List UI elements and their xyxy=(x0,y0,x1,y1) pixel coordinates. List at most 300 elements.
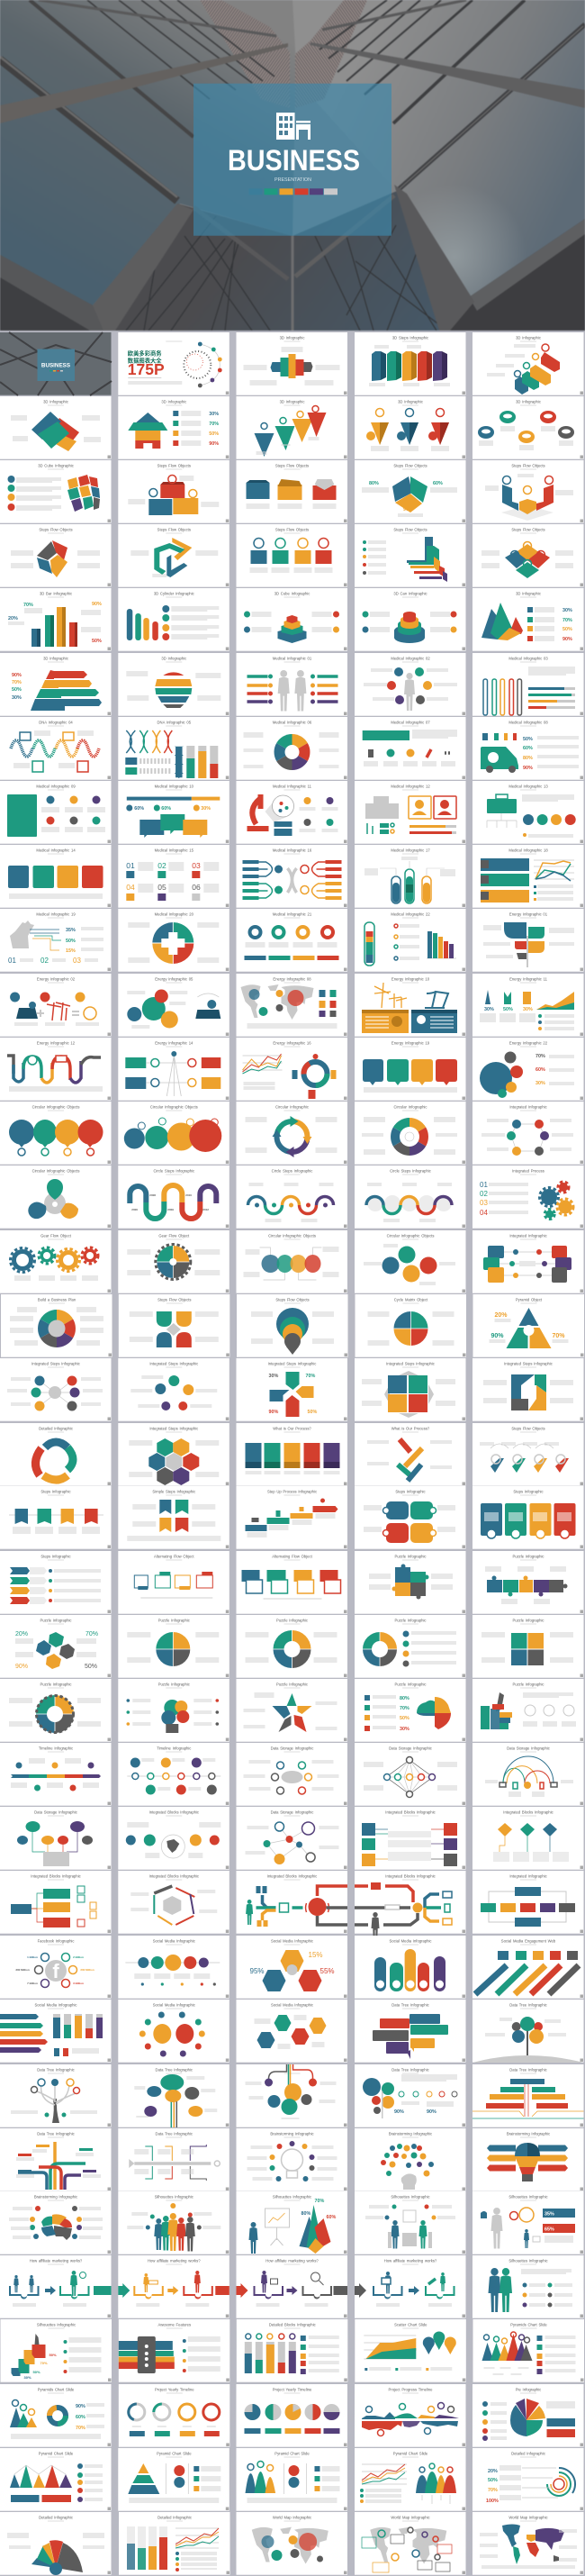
slide 64 xyxy=(355,1102,466,1165)
slide 1: cover thumbnail xyxy=(0,332,112,395)
slide 26: 50% xyxy=(12,687,22,693)
slide 171: Detailed Infographic xyxy=(39,2515,73,2520)
slide 139: Data Tree Infographic xyxy=(392,2068,429,2072)
slide 70: 04 xyxy=(480,1209,488,1217)
slide 44: Medical Infographic 17 xyxy=(391,848,430,852)
slide 107 xyxy=(118,1679,230,1742)
slide 129: Social Media Infographic xyxy=(389,1938,432,1944)
slide 30 xyxy=(472,653,583,716)
slide 83: 90% xyxy=(268,1410,278,1415)
slide 63 xyxy=(236,1102,347,1165)
slide 42: 02 xyxy=(158,861,166,870)
slide 174 xyxy=(355,2512,466,2575)
slide 56: Energy Infographic 12 xyxy=(37,1041,76,1045)
slide 161: Pyramids Chart Slide xyxy=(38,2387,75,2392)
slide 13: Steps Flow Objects xyxy=(275,463,309,468)
slide 114 xyxy=(355,1743,466,1806)
slide 152 xyxy=(118,2255,230,2318)
slide 156: Silhouettes Infographic xyxy=(37,2322,76,2327)
slide 126: 7 Billion xyxy=(27,1982,38,1985)
slide 148: 80% xyxy=(301,2211,310,2217)
slide 22 xyxy=(118,588,230,651)
slide 67: 2006 xyxy=(131,1208,138,1211)
slide 17: Steps Flow Objects xyxy=(158,528,191,531)
slide 82 xyxy=(118,1358,230,1421)
slide 91: Steps Infographic xyxy=(40,1490,71,1493)
slide 59 xyxy=(355,1038,466,1101)
slide 51: Energy Infographic 02 xyxy=(37,976,76,982)
slide 27: 3D Infographic xyxy=(161,656,186,661)
slide 154 xyxy=(355,2255,466,2318)
slide 52: Energy Infographic 05 xyxy=(155,976,194,982)
slide 40: Medical Infographic 13 xyxy=(508,784,548,789)
slide 101: 20% xyxy=(15,1631,28,1637)
slide 144: Brainstorming Infographic xyxy=(389,2131,432,2136)
slide 2: 175P title slide: 175P xyxy=(128,360,165,378)
slide 41: Medical Infographic 14 xyxy=(36,848,76,852)
slide 97: Alternating Flow Object xyxy=(154,1555,194,1558)
slide 166: Pyramid Chart Slide xyxy=(39,2452,74,2455)
slide 155: Silhouettes Infographic xyxy=(508,2259,548,2263)
slide 22: 3D Cylinder Infographic xyxy=(154,591,194,596)
slide 11: 3D Cube Infographic xyxy=(38,463,74,468)
slide 175: World Map Infographic xyxy=(508,2515,548,2520)
slide 67 xyxy=(118,1166,230,1229)
slide 68: Circle Steps Infographic xyxy=(272,1169,312,1173)
slide 24 xyxy=(355,588,466,651)
slide 70: 01 xyxy=(480,1181,488,1189)
slide 36 xyxy=(0,781,112,844)
slide 67: 2010 xyxy=(185,1193,192,1197)
slide 1: cover thumbnail: BUSINESS xyxy=(41,362,70,369)
slide 7: 30% xyxy=(209,412,219,417)
slide 20: Steps Flow Objects xyxy=(511,528,545,531)
slide 131 xyxy=(0,2000,112,2063)
slide 130: Social Media Engagement Web xyxy=(501,1938,556,1944)
slide 113: Data Storage Infographic xyxy=(271,1746,313,1751)
slide 126: 1 Billion xyxy=(27,1955,38,1959)
slide 77 xyxy=(119,1294,230,1357)
slide 25: 30% xyxy=(562,608,572,613)
slide 139: 90% xyxy=(427,2109,436,2115)
slide 145: Brainstorming Infographic xyxy=(507,2131,550,2136)
slide 21: 50% xyxy=(92,639,102,644)
slide 137: Data Tree Infographic xyxy=(156,2068,193,2072)
slide 99 xyxy=(355,1551,466,1614)
slide 29 xyxy=(355,653,466,716)
slide 76: Build a Business Plan xyxy=(38,1297,76,1302)
slide 70: 03 xyxy=(480,1199,488,1207)
slide 156: 50% xyxy=(32,2370,40,2374)
slide 78: Steps Flow Objects xyxy=(275,1297,310,1302)
slide 123 xyxy=(236,1871,347,1934)
slide 127 xyxy=(118,1936,230,1999)
slide 23: 3D Cube Infographic xyxy=(274,591,310,596)
slide 146: Brainstorming Infographic xyxy=(34,2194,77,2200)
slide 5: 3D Infographic xyxy=(516,335,541,340)
slide 53 xyxy=(236,974,347,1037)
slide 83: 30% xyxy=(268,1374,278,1379)
slide 54: Energy Infographic 10 xyxy=(392,976,430,982)
slide 8: 3D Infographic xyxy=(280,400,304,404)
slide 84: Integrated Steps Infographic xyxy=(386,1362,435,1365)
hero: skyscraper photo banner xyxy=(0,0,585,331)
slide 101: 50% xyxy=(85,1664,97,1670)
slide 93 xyxy=(236,1486,347,1549)
slide 3 xyxy=(236,332,347,395)
slide 25: 90% xyxy=(562,637,572,642)
slide 126: 200 Million xyxy=(80,1968,94,1972)
slide 63: Circular Infographic xyxy=(275,1104,309,1110)
slide 129 xyxy=(355,1936,466,1999)
slide 101: Puzzle Infographic xyxy=(40,1618,72,1623)
slide 91 xyxy=(0,1486,112,1549)
slide 57: Energy Infographic 14 xyxy=(155,1041,194,1045)
slide 57 xyxy=(118,1038,230,1101)
slide 13 xyxy=(236,460,347,523)
slide 106: Puzzle Infographic xyxy=(40,1683,72,1686)
slide 141: Data Tree Infographic xyxy=(37,2131,75,2136)
slide 86 xyxy=(0,1423,112,1486)
slide 143: Brainstorming Infographic xyxy=(270,2131,314,2136)
slide 109: 30% xyxy=(400,1727,410,1732)
slide 27 xyxy=(118,653,230,716)
slide 61: Circular Infographic Objects xyxy=(32,1104,79,1110)
slide 40 xyxy=(472,781,583,844)
slide 148: Silhouettes Infographic xyxy=(273,2194,311,2200)
slide 66: Circular Infographic Objects xyxy=(32,1169,79,1173)
slide 120 xyxy=(472,1807,583,1870)
slide 70 xyxy=(472,1166,583,1229)
slide 139: 90% xyxy=(394,2109,404,2115)
slide 49: Medical Infographic 22 xyxy=(391,912,430,917)
slide 170 xyxy=(472,2448,583,2511)
slide 25: 70% xyxy=(562,618,572,623)
slide 148: 70% xyxy=(315,2199,324,2204)
slide 26: 70% xyxy=(12,680,22,685)
slide 149 xyxy=(355,2191,466,2254)
slide 60: 30% xyxy=(536,1081,545,1086)
slide 169: Pyramid Chart Slide xyxy=(393,2452,428,2455)
slide 32 xyxy=(118,717,230,780)
slide 21 xyxy=(0,588,112,651)
slide 2: 175P title slide: 欧美多彩商务 xyxy=(128,349,162,357)
slide 128: 15% xyxy=(308,1951,323,1959)
slide 136: Data Tree Infographic xyxy=(37,2068,75,2072)
slide 130 xyxy=(472,1936,583,1999)
slide 173: World Map Infographic xyxy=(273,2515,311,2520)
slide 76 xyxy=(1,1294,112,1357)
slide 3: 3D Infographic xyxy=(280,335,304,340)
slide 25: 50% xyxy=(562,627,572,632)
slide 14: 60% xyxy=(433,481,443,486)
slide 80: 20% xyxy=(495,1312,508,1319)
slide 156: 50% xyxy=(49,2353,57,2357)
slide 148 xyxy=(236,2191,347,2254)
slide 173 xyxy=(236,2512,347,2575)
slide 131: Social Media Infographic xyxy=(34,2003,77,2007)
slide 85: Integrated Steps Infographic xyxy=(504,1362,553,1365)
slide 33: Medical Infographic 06 xyxy=(273,721,312,724)
slide 21: 20% xyxy=(8,616,18,621)
slide 6: 3D Infographic xyxy=(43,400,68,404)
slide 4 xyxy=(355,332,466,395)
slide 174: World Map Infographic xyxy=(391,2515,430,2520)
slide 61 xyxy=(0,1102,112,1165)
slide 30: Medical Infographic 03 xyxy=(508,656,548,661)
slide 126: 300 Million xyxy=(15,1968,30,1972)
slide 8 xyxy=(236,396,347,459)
slide 101 xyxy=(0,1615,112,1678)
slide 93: Step Up Process Infographic xyxy=(267,1490,317,1493)
slide 125: Integrated Infographic xyxy=(509,1873,547,1879)
slide 157 xyxy=(119,2319,230,2382)
slide 34: Medical Infographic 07 xyxy=(391,721,430,724)
slide 42: 04 xyxy=(126,883,135,892)
slide 37: 30% xyxy=(201,806,211,812)
slide 20 xyxy=(472,524,583,587)
slide 84 xyxy=(355,1358,466,1421)
slide 58: Energy Infographic 16 xyxy=(273,1041,311,1045)
slide 158 xyxy=(237,2319,347,2382)
slide 105: Puzzle Infographic xyxy=(512,1618,544,1623)
slide 80 xyxy=(473,1294,584,1357)
slide 100: Puzzle Infographic xyxy=(512,1555,544,1558)
slide 46: 15% xyxy=(66,948,76,954)
slide 38: Medical Infographic 11 xyxy=(273,784,312,789)
slide 80: 90% xyxy=(491,1333,504,1339)
slide 14 xyxy=(355,460,466,523)
slide 88: What is Our Process? xyxy=(273,1427,311,1430)
slide 169 xyxy=(355,2448,466,2511)
slide 104 xyxy=(355,1615,466,1678)
slide 19: Steps Flow Objects xyxy=(393,528,428,531)
slide 161 xyxy=(0,2384,112,2447)
slide 79: Cycle Matrix Object xyxy=(394,1297,428,1302)
slide 121 xyxy=(0,1871,112,1934)
slide 170: 50% xyxy=(488,2478,498,2483)
slide 154: How affiliate marketing works? xyxy=(384,2259,437,2263)
slide 43 xyxy=(236,845,347,908)
slide 60 xyxy=(472,1038,583,1101)
slide 60: 70% xyxy=(536,1054,545,1059)
slide 160 xyxy=(473,2319,584,2382)
slide 128: 95% xyxy=(250,1967,265,1975)
slide 66 xyxy=(0,1166,112,1229)
slide 109: Puzzle Infographic xyxy=(394,1683,427,1686)
slide 92: Simple Steps Infographic xyxy=(152,1490,195,1493)
slide 109 xyxy=(355,1679,466,1742)
slide 166 xyxy=(0,2448,112,2511)
slide 165 xyxy=(472,2384,583,2447)
slide 18: Steps Flow Objects xyxy=(275,528,309,531)
slide 112: Timeline Infographic xyxy=(157,1746,191,1751)
slide 171 xyxy=(0,2512,112,2575)
slide 101: 70% xyxy=(86,1631,98,1637)
slide 55: 30% xyxy=(523,1007,533,1012)
slide 69 xyxy=(355,1166,466,1229)
slide 83 xyxy=(236,1358,347,1421)
slide 100 xyxy=(472,1551,583,1614)
slide 135: Data Tree Infographic xyxy=(509,2003,547,2007)
slide 99: Puzzle Infographic xyxy=(394,1555,427,1558)
slide 98 xyxy=(236,1551,347,1614)
slide 96: Steps Infographic xyxy=(40,1555,71,1558)
slide 128: Social Media Infographic xyxy=(271,1938,313,1944)
slide 68 xyxy=(236,1166,347,1229)
slide 105 xyxy=(472,1615,583,1678)
slide 45: Medical Infographic 18 xyxy=(508,848,548,852)
slide 95: Steps Infographic xyxy=(513,1490,544,1493)
slide 9 xyxy=(355,396,466,459)
heading: BUSINESS: BUSINESS xyxy=(228,144,360,177)
slide 126: 2 Billion xyxy=(73,1955,84,1959)
slide 83: 70% xyxy=(306,1374,315,1379)
slide 170: Detailed Infographic xyxy=(511,2452,545,2455)
slide 152: How affiliate marketing works? xyxy=(148,2259,201,2263)
slide 42: 05 xyxy=(158,883,166,892)
slide 90 xyxy=(472,1423,583,1486)
slide 142: Data Tree Infographic xyxy=(156,2131,193,2136)
slide 49 xyxy=(355,909,466,972)
slide 2: 175P title slide: 数据图表大全 xyxy=(128,357,162,364)
slide 155 xyxy=(472,2255,583,2318)
slide 46: 50% xyxy=(66,939,76,944)
slide 151: How affiliate marketing works? xyxy=(30,2259,83,2263)
slide 55: 30% xyxy=(484,1007,494,1012)
slide 116: Data Storage Infographic xyxy=(34,1810,77,1814)
slide 79 xyxy=(355,1294,466,1357)
slide 103 xyxy=(236,1615,347,1678)
slide 124: Integrated Blocks Infographic xyxy=(385,1873,436,1879)
slide 37 xyxy=(118,781,230,844)
slide 132: Social Media Infographic xyxy=(153,2003,195,2007)
slide 14: 80% xyxy=(369,481,379,486)
slide 16 xyxy=(0,524,112,587)
slide 122: Integrated Blocks Infographic xyxy=(149,1873,199,1879)
slide 25: 3D Infographic xyxy=(516,591,541,596)
slide 74 xyxy=(355,1230,466,1293)
slide 44 xyxy=(355,845,466,908)
slide 103: Puzzle Infographic xyxy=(276,1618,308,1623)
slide 114: Data Storage Infographic xyxy=(389,1746,432,1751)
slide 167 xyxy=(118,2448,230,2511)
slide 70: Integrated Process xyxy=(512,1169,544,1173)
slide 90: Steps Flow Objects xyxy=(511,1427,545,1430)
slide 31 xyxy=(0,717,112,780)
slide 75 xyxy=(472,1230,583,1293)
slide 69: Circle Steps Infographic xyxy=(390,1169,431,1173)
slide 83: Integrated Steps Infographic xyxy=(268,1362,316,1365)
slide 170: 100% xyxy=(486,2499,499,2504)
slide 170: 70% xyxy=(488,2488,498,2493)
slide 104: Puzzle Infographic xyxy=(394,1618,427,1623)
slide 67: 2008 xyxy=(149,1193,156,1197)
slide 10 xyxy=(472,396,583,459)
slide 16: Steps Flow Objects xyxy=(39,528,73,531)
slide 160: Pyramids Chart Slide xyxy=(510,2322,547,2327)
slide 7: 70% xyxy=(209,422,219,427)
slide 168: Pyramid Chart Slide xyxy=(274,2452,310,2455)
slide 117 xyxy=(118,1807,230,1870)
slide 35 xyxy=(472,717,583,780)
slide 38 xyxy=(236,781,347,844)
slide 48: Medical Infographic 21 xyxy=(273,912,312,917)
slide 35: 60% xyxy=(523,746,533,751)
slide 74: Circular Infographic Objects xyxy=(387,1234,434,1238)
slide 23 xyxy=(236,588,347,651)
slide 80: 70% xyxy=(553,1333,565,1339)
slide 50: Energy Infographic 01 xyxy=(509,912,548,917)
slide 28: Medical Infographic 01 xyxy=(273,656,312,661)
slide 56 xyxy=(0,1038,112,1101)
slide 7: 90% xyxy=(209,441,219,447)
slide 126: f xyxy=(52,1960,59,1982)
slide 26 xyxy=(0,653,112,716)
slide 5 xyxy=(472,332,583,395)
slide 42: 01 xyxy=(126,861,135,870)
slide 34 xyxy=(355,717,466,780)
slide 70: 02 xyxy=(480,1190,488,1198)
slide 115: Data Storage Infographic xyxy=(507,1746,550,1751)
slide 18 xyxy=(236,524,347,587)
slide 109: 50% xyxy=(400,1716,410,1721)
slide 47: Medical Infographic 20 xyxy=(155,912,194,917)
slide 111: Timeline Infographic xyxy=(39,1746,73,1751)
slide 28 xyxy=(236,653,347,716)
slide 48 xyxy=(236,909,347,972)
slide 60: 60% xyxy=(536,1067,545,1073)
slide 161: 90% xyxy=(76,2404,86,2409)
slide 62: Circular Infographic Objects xyxy=(150,1104,198,1110)
slide 150: 35% xyxy=(544,2212,554,2218)
slide 109: 80% xyxy=(400,1696,410,1701)
slide 42 xyxy=(118,845,230,908)
slide 55 xyxy=(472,974,583,1037)
slide 123: Integrated Blocks Infographic xyxy=(267,1873,317,1879)
slide 158: Detailed Blocks Infographic xyxy=(269,2322,316,2327)
slide 60: Energy Infographic 22 xyxy=(509,1041,548,1045)
slide 12 xyxy=(118,460,230,523)
slide 64: Circular Infographic xyxy=(394,1104,427,1110)
slide 126: 3 Billion xyxy=(73,1982,84,1985)
slide 2: 175P title slide xyxy=(118,332,230,395)
slide 144 xyxy=(355,2128,466,2191)
slide 33 xyxy=(236,717,347,780)
slide 116 xyxy=(0,1807,112,1870)
slide 41 xyxy=(0,845,112,908)
slide 145 xyxy=(472,2128,583,2191)
slide 124 xyxy=(355,1871,466,1940)
slide 11 xyxy=(0,460,112,523)
slide 87 xyxy=(118,1423,230,1486)
slide 19 xyxy=(355,524,466,587)
slide 110 xyxy=(472,1679,583,1742)
slide 162: Project Yearly Timeline xyxy=(155,2387,194,2392)
slide 172: Detailed Infographic xyxy=(158,2515,192,2520)
colour swatches xyxy=(248,188,338,195)
subheading: PRESENTATION: PRESENTATION xyxy=(274,177,311,183)
slide 147 xyxy=(118,2191,230,2254)
slide 6 xyxy=(0,396,112,459)
slide 148: 60% xyxy=(326,2215,336,2220)
slide 75: Integrated Infographic xyxy=(509,1234,547,1238)
slide 62 xyxy=(118,1102,230,1165)
slide 80: Pyramid Object xyxy=(516,1297,543,1302)
slide 140 xyxy=(472,2064,583,2127)
slide 45 xyxy=(472,845,583,908)
slide 96 xyxy=(0,1551,112,1614)
